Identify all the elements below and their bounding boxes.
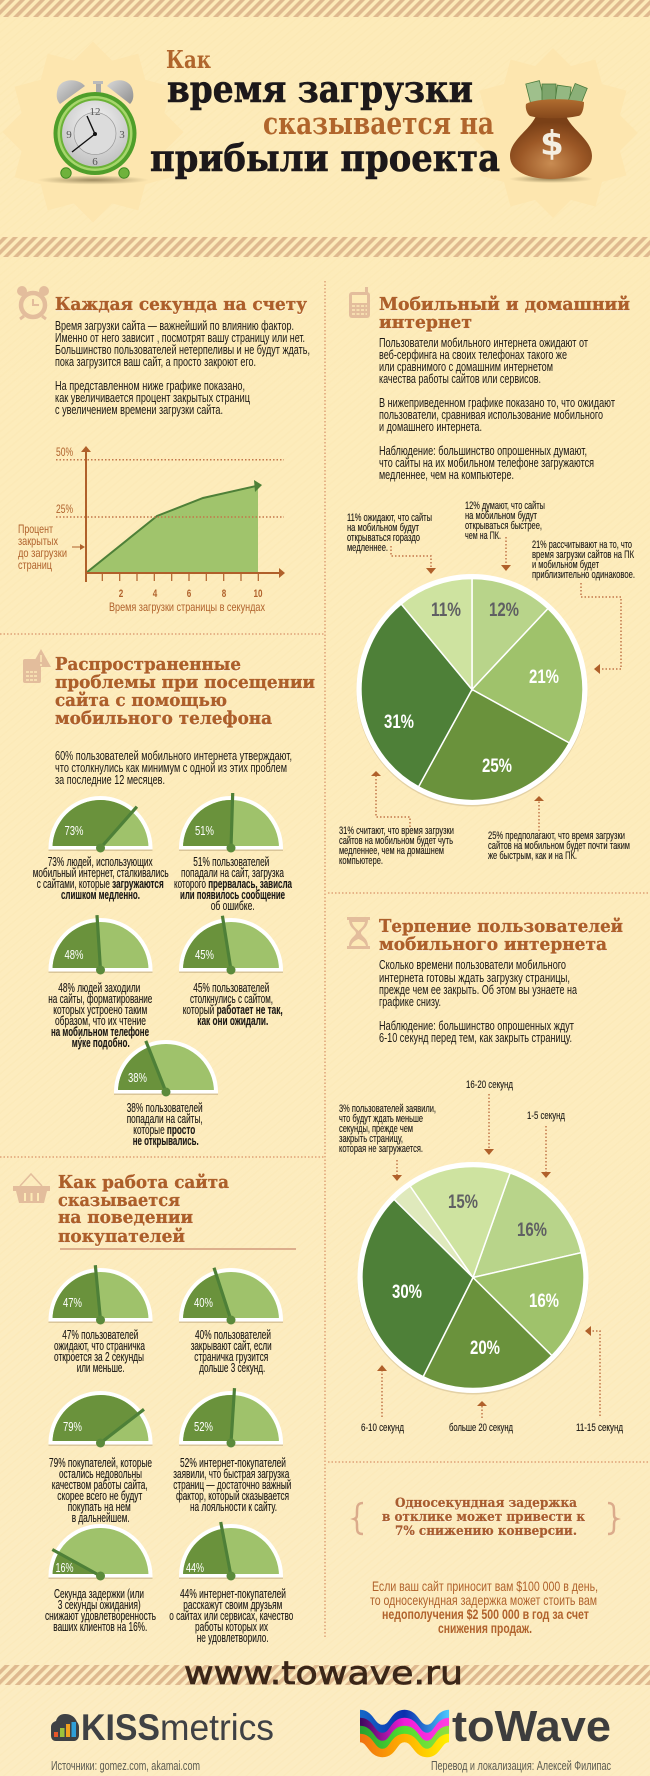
area chart: 25% — [56, 502, 73, 516]
caption: 16%: Секунда задержки (или — [54, 1587, 144, 1601]
pie chart: 25% — [482, 756, 512, 777]
gauge: 44%: 44% — [186, 1560, 204, 1575]
heading: мобильного телефона — [55, 708, 272, 729]
icon: alarm clock — [17, 286, 49, 319]
caption: 73%: слишком медленно. — [61, 888, 140, 902]
heading: Как работа сайта — [58, 1172, 229, 1193]
callout: 11% — [347, 512, 432, 554]
caption: 47% — [54, 1328, 145, 1375]
gauge: 40% — [179, 1268, 283, 1324]
caption: 52%: фактор, который сказывается — [176, 1489, 289, 1503]
icon: starburst behind clock — [2, 41, 184, 223]
caption: 45%: столкнулись с сайтом, — [190, 992, 273, 1006]
heading: на поведении — [58, 1207, 193, 1228]
callout text: Односекундная задержка — [395, 1496, 578, 1511]
label: 1-5 seconds: 1-5 секунд — [527, 1110, 565, 1122]
caption: 73%: 73% людей, использующих — [48, 855, 153, 869]
sources: Источники: gomez.com, akamai.com — [51, 1759, 200, 1773]
caption: 44%: расскажут своим друзьям — [183, 1598, 282, 1612]
icon: starburst behind money bag — [468, 48, 638, 218]
area chart: страниц — [18, 558, 52, 572]
panel: mobile user patience — [339, 916, 623, 1434]
caption: 51%: об ошибке. — [211, 899, 255, 913]
text block: Большинство пользователей нетерпеливы и не будут ждать, — [55, 343, 310, 357]
gauge: 38% — [114, 1040, 218, 1096]
callout text: 7% снижению конверсии. — [395, 1524, 577, 1539]
text block: На представленном ниже графике показано, — [55, 379, 245, 393]
callout text — [382, 1496, 586, 1539]
caption: 45%: как они ожидали. — [197, 1014, 268, 1028]
caption: 16%: ваших клиентов на 16%. — [53, 1620, 147, 1634]
icon: alarm clock: 12 — [90, 106, 100, 118]
panel: every second counts — [17, 286, 310, 614]
callout: 12%: открываться быстрее, — [465, 520, 542, 532]
title: Как — [166, 45, 212, 74]
callout: 12% — [465, 500, 545, 542]
gauge: 51% — [179, 793, 283, 852]
caption: 79% — [49, 1456, 152, 1525]
text block: снижения продаж. — [438, 1620, 532, 1636]
caption: 47%: или меньше. — [77, 1361, 125, 1375]
label: 6-10 seconds: 6-10 секунд — [361, 1422, 404, 1434]
caption: 79%: в дальнейшем. — [72, 1511, 130, 1525]
pie chart: 21% — [529, 667, 559, 688]
label: 11-15 seconds — [576, 1326, 623, 1434]
text block: Сколько времени пользователи мобильного — [379, 958, 566, 972]
callout: 25%: же быстрым, как и на ПК. — [488, 850, 577, 862]
caption: 45%: который работает не так, — [183, 1003, 283, 1017]
header — [2, 41, 638, 223]
callout: 12%: на мобильном будут — [465, 510, 537, 522]
text block: графике снизу. — [379, 995, 441, 1009]
icon: alarm clock: 9 — [66, 129, 72, 141]
caption: 51%: попадали на сайт, загрузка — [181, 866, 284, 880]
pie chart — [356, 574, 588, 806]
callout: 31%: сайтов на мобильном будет чуть — [339, 835, 453, 847]
text block: пока загрузится ваш сайт, а просто закроют его. — [55, 355, 256, 369]
text block: или сравнимого с домашним интернетом — [379, 360, 553, 374]
callout: 31% — [339, 825, 454, 867]
callout: 11%: медленнее. — [347, 542, 388, 554]
logo: KISSmetrics: metrics — [160, 1707, 274, 1748]
panel: mobile vs home internet — [339, 287, 635, 867]
pie chart — [358, 1162, 588, 1394]
caption: 73%: с сайтами, которые загружаются — [37, 877, 164, 891]
text block: и домашнего интернета. — [379, 420, 482, 434]
callout: 11%: на мобильном будут — [347, 522, 419, 534]
caption: 73% — [33, 855, 169, 902]
logo: toWave — [360, 1702, 611, 1753]
icon: money bag — [509, 81, 593, 183]
area chart — [18, 445, 285, 614]
caption: 48%: образом, что их чтение — [55, 1014, 146, 1028]
callout: 31%: компьютере. — [339, 855, 383, 867]
caption: 44% — [169, 1587, 293, 1645]
caption: 52%: 52% интернет-покупателей — [180, 1456, 286, 1470]
caption: 40%: страничка грузится — [194, 1350, 268, 1364]
icon: phone with warning — [23, 649, 51, 683]
heading: Мобильный и домашний — [379, 294, 630, 315]
gauge: 48% — [48, 915, 152, 974]
caption: 16%: снижают удовлетворенность — [45, 1609, 156, 1623]
label: over 20 seconds: больше 20 секунд — [449, 1422, 513, 1434]
caption: 73%: мобильный интернет, сталкивались — [33, 866, 169, 880]
gauge: 44% — [179, 1522, 283, 1580]
title: время загрузки — [167, 67, 473, 111]
caption: 48%: му́ке подобно. — [72, 1036, 130, 1050]
text block: качества работы сайтов или сервисов. — [379, 372, 541, 386]
caption: 40%: дольше 3 секунд. — [199, 1361, 265, 1375]
icon: alarm clock: 3 — [119, 129, 125, 141]
gauge: 38%: 38% — [128, 1070, 147, 1085]
callout: 21%: и мобильном будет — [532, 559, 599, 571]
pie chart: 31% — [384, 712, 414, 733]
caption: 47%: ожидают, что страничка — [54, 1339, 145, 1353]
callout: 21% — [532, 539, 635, 581]
callout: 3%: секунды, прежде чем — [339, 1123, 413, 1135]
heading: сказывается — [58, 1190, 180, 1211]
heading: Распространенные — [55, 654, 241, 675]
arrow: 31% — [371, 771, 410, 827]
caption: 79%: скорее всего не будут — [57, 1489, 142, 1503]
icon: left brace — [354, 1503, 363, 1534]
area chart: Время загрузки страницы в секундах — [109, 600, 265, 614]
label: 11-15 seconds: 11-15 секунд — [576, 1422, 623, 1434]
heading: интернет — [379, 312, 472, 333]
pie chart: 30% — [392, 1282, 422, 1303]
caption: 79%: покупать на нем — [68, 1500, 131, 1514]
text block: с увеличением времени загрузки сайта. — [55, 403, 223, 417]
gauge: 40%: 40% — [194, 1295, 213, 1310]
callout: 3% — [339, 1103, 436, 1181]
icon: alarm clock: 6 — [92, 156, 98, 168]
logo: toWave: toWave — [452, 1702, 611, 1751]
text block: 6-10 секунд перед тем, как закрыть страницу. — [379, 1031, 572, 1045]
gauge: 79%: 79% — [63, 1419, 82, 1434]
caption: 38%: 38% пользователей — [127, 1101, 203, 1115]
callout: 3%: закрыть страницу, — [339, 1133, 403, 1145]
label: 16-20 seconds — [466, 1079, 513, 1155]
caption: 47%: 47% пользователей — [62, 1328, 138, 1342]
pie chart: 20% — [470, 1338, 500, 1359]
label: 16-20 seconds: 16-20 секунд — [466, 1079, 513, 1091]
gauge: 47%: 47% — [63, 1295, 82, 1310]
text block: интернета готовы ждать загрузку страницы, — [379, 971, 570, 985]
gauge: 79% — [48, 1391, 152, 1448]
caption: 38% — [127, 1101, 203, 1148]
gauge: 16% — [48, 1524, 152, 1580]
caption: 51%: которого прервалась, зависла — [174, 877, 293, 891]
heading: покупателей — [58, 1226, 185, 1247]
heading: сайта с помощью — [55, 690, 227, 711]
logo: KISSmetrics — [51, 1707, 274, 1748]
icon: money bag: $ — [540, 124, 564, 164]
icon: hourglass — [347, 917, 370, 949]
arrow: 21% — [581, 583, 621, 674]
label: 1-5 seconds — [527, 1110, 565, 1178]
caption: 48%: которых устроено таким — [53, 1003, 147, 1017]
caption: 38%: не открывались. — [133, 1134, 199, 1148]
pie chart: 15% — [448, 1192, 478, 1213]
area chart: 6 — [187, 588, 191, 600]
caption: 79%: 79% покупателей, которые — [49, 1456, 152, 1470]
callout: 3%: что будут ждать меньше — [339, 1113, 423, 1125]
caption: 48%: на мобильном телефоне — [51, 1025, 149, 1039]
caption: 44%: 44% интернет-покупателей — [180, 1587, 286, 1601]
area chart: Процент — [18, 522, 53, 536]
caption: 48% — [48, 981, 152, 1050]
pie chart: 16% — [529, 1291, 559, 1312]
caption: 48%: на сайты, форматирование — [48, 992, 152, 1006]
pie chart: 11% — [431, 600, 461, 621]
gauge: 73% — [48, 796, 152, 852]
caption: 38%: которые просто — [133, 1123, 196, 1137]
caption: 51%: или появилось сообщение — [180, 888, 285, 902]
caption: 52% — [173, 1456, 291, 1514]
text block: 60% пользователей мобильного интернета утверждают, — [55, 749, 292, 763]
heading — [58, 1172, 229, 1247]
callout: 12%: чем на ПК. — [465, 530, 501, 542]
area chart: 50% — [56, 445, 73, 459]
caption: 48%: 48% людей заходили — [58, 981, 140, 995]
text block — [379, 958, 577, 1045]
callout: 11%: открываться гораздо — [347, 532, 420, 544]
text block — [370, 1578, 598, 1636]
caption: 40%: 40% пользователей — [195, 1328, 271, 1342]
logo: KISSmetrics: KISS — [81, 1707, 160, 1748]
arrow: 11% — [391, 546, 436, 574]
area chart: 10 — [254, 588, 262, 600]
label: over 20 seconds — [449, 1401, 513, 1434]
area chart: закрытых — [18, 534, 58, 548]
callout: 12%: 12% думают, что сайты — [465, 500, 545, 512]
caption: 52%: на лояльности к сайту. — [190, 1500, 277, 1514]
caption: 47%: откроется за 2 секунды — [54, 1350, 144, 1364]
callout: 3%: 3% пользователей заявили, — [339, 1103, 436, 1115]
arrow: 12% — [501, 537, 511, 571]
gauge: 52% — [179, 1388, 283, 1448]
caption: 79%: остались недовольны — [59, 1467, 142, 1481]
panel: conversion callout — [354, 1496, 617, 1636]
caption: 45% — [183, 981, 283, 1028]
title: прибыли проекта — [150, 136, 500, 180]
text block — [55, 319, 310, 417]
text block — [55, 749, 292, 787]
pie chart: 12% — [489, 600, 519, 621]
callout text: в отклике может привести к — [382, 1510, 586, 1525]
caption: 16% — [45, 1587, 156, 1634]
text block: за последние 12 месяцев. — [55, 773, 165, 787]
pie chart: 16% — [517, 1220, 547, 1241]
text block — [379, 336, 615, 482]
icon: mobile phone — [349, 287, 370, 318]
heading: Терпение пользователей — [379, 916, 623, 937]
heading — [379, 294, 630, 333]
callout: 31%: медленнее, чем на домашнем — [339, 845, 444, 857]
gauge: 16%: 16% — [56, 1560, 74, 1575]
caption: 45%: 45% пользователей — [193, 981, 269, 995]
panel: common mobile problems — [23, 649, 315, 1148]
caption: 51%: 51% пользователей — [193, 855, 269, 869]
callout: 11%: 11% ожидают, что сайты — [347, 512, 432, 524]
caption: 44%: работы которых их — [195, 1620, 268, 1634]
callout: 25% — [488, 830, 630, 862]
caption: 51% — [174, 855, 293, 913]
text block: Время загрузки сайта — важнейший по влиянию фактор. — [55, 319, 294, 333]
panel: buyer behaviour — [13, 1172, 296, 1645]
title: сказывается на — [263, 106, 494, 142]
caption: 40%: закрывают сайт, если — [191, 1339, 272, 1353]
icon: basket — [13, 1174, 50, 1203]
caption: 44%: не удовлетворило. — [197, 1631, 269, 1645]
gauge: 45%: 45% — [195, 947, 214, 962]
heading: Каждая секунда на счету — [55, 294, 307, 315]
heading: проблемы при посещении — [55, 672, 315, 693]
title — [150, 45, 500, 180]
area chart: 8 — [222, 588, 226, 600]
icon: alarm clock — [37, 80, 149, 184]
arrow: 25% — [534, 796, 544, 831]
area chart: 2 — [119, 588, 123, 600]
callout: 31%: 31% считают, что время загрузки — [339, 825, 454, 837]
gauge: 51%: 51% — [195, 823, 214, 838]
text block: Именно от него зависит , посмотрят вашу страницу или нет. — [55, 331, 305, 345]
caption: 79%: качеством работы сайта, — [52, 1478, 148, 1492]
text block: недополучения $2 500 000 в год за счет — [382, 1606, 589, 1622]
text block: прежде чем ее закрыть. Об этом вы узнаете на — [379, 983, 577, 997]
gauge: 73%: 73% — [64, 823, 84, 838]
heading — [55, 654, 315, 729]
text block: как увеличивается процент закрытых страниц — [55, 391, 250, 405]
heading — [379, 916, 623, 955]
caption: 16%: 3 секунды ожидания) — [58, 1598, 141, 1612]
caption: 40% — [191, 1328, 272, 1375]
gauge: 47% — [48, 1265, 152, 1324]
label: 6-10 seconds — [361, 1365, 404, 1434]
text block: Наблюдение: большинство опрошенных ждут — [379, 1019, 574, 1033]
text block: что столкнулись как минимум с одной из этих проблем — [55, 761, 287, 775]
caption: 44%: о сайтах или сервисах, качество — [169, 1609, 293, 1623]
caption: 52%: заявили, что быстрая загрузка — [173, 1467, 289, 1481]
heading: мобильного интернета — [379, 934, 607, 955]
text block: веб-серфинга на своих телефонах такого же — [379, 348, 567, 362]
website url: www.towave.ru — [184, 1654, 463, 1692]
caption: 38%: попадали на сайты, — [127, 1112, 203, 1126]
area chart: 4 — [153, 588, 158, 600]
gauge: 45% — [179, 916, 283, 974]
gauge: 48%: 48% — [64, 947, 84, 962]
icon: right brace — [608, 1503, 617, 1534]
area chart: до загрузки — [18, 546, 67, 560]
footer — [51, 1654, 611, 1773]
gauge: 52%: 52% — [194, 1419, 213, 1434]
text block: медленнее, чем на компьютере. — [379, 468, 514, 482]
caption: 52%: страниц — достаточно важный — [173, 1478, 291, 1492]
callout: 3%: которая не загружается. — [339, 1143, 423, 1155]
